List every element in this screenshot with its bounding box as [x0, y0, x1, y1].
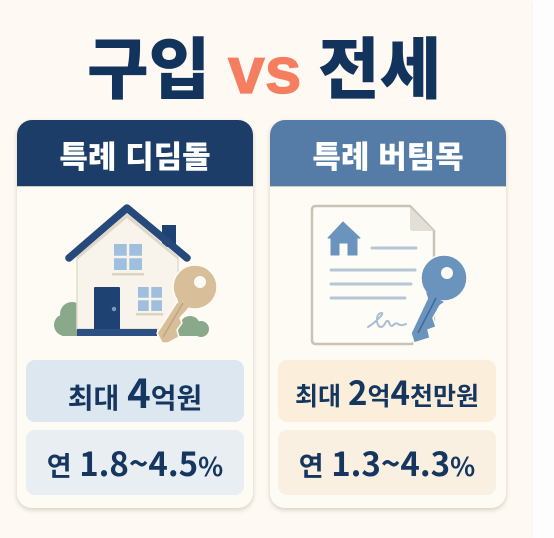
icon: house with key	[54, 204, 216, 342]
panel heading: 특례 버팀목: 특례 버팀목	[312, 132, 464, 177]
info box: 연 1.3~4.3%: 연 1.3~4.3%	[299, 438, 475, 486]
title: 전세	[318, 16, 441, 113]
key	[411, 255, 467, 343]
info box: 최대 2억4천만원: 최대 2억4천만원	[295, 367, 479, 415]
info box: 연 1.8~4.5%: 연 1.8~4.5%	[47, 438, 223, 486]
info box: 연 1.8~4.5%	[26, 430, 244, 495]
icon: contract with key	[310, 204, 466, 346]
panel: 특례 버팀목	[270, 120, 506, 508]
title: vs	[228, 33, 301, 107]
bushes	[54, 302, 209, 337]
info box: 연 1.3~4.3%	[278, 430, 496, 495]
panel heading: 특례 디딤돌: 특례 디딤돌	[59, 132, 211, 177]
info box: 최대 4억원: 최대 4억원	[68, 362, 202, 420]
key	[157, 265, 217, 343]
panel heading: 특례 디딤돌	[17, 120, 253, 187]
title: 구입	[87, 16, 210, 113]
title	[87, 16, 441, 113]
info box: 최대 4억원	[26, 360, 244, 422]
panel: 특례 디딤돌	[17, 120, 253, 508]
icon: small house	[328, 222, 360, 255]
panel heading: 특례 버팀목	[270, 120, 506, 187]
info box: 최대 2억4천만원	[278, 360, 496, 422]
